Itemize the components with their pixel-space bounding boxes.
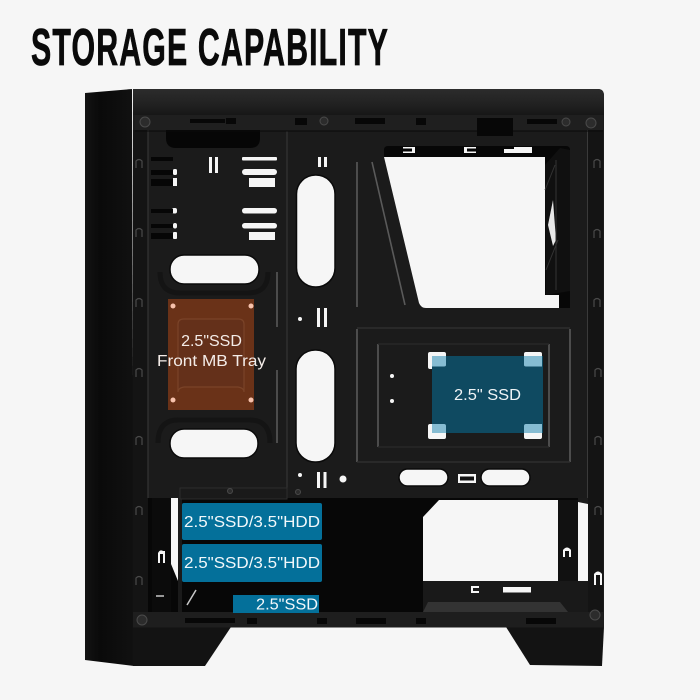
callout: rear 2.5 inch SSD: [428, 352, 543, 439]
lower bay interior: [148, 498, 578, 613]
upper right window: [384, 146, 570, 308]
floor marks: [471, 586, 531, 593]
callout: drive bay 1: 2.5"SSD/3.5"HDD: [184, 514, 320, 531]
right gap: [578, 502, 588, 592]
plate seams: [135, 130, 603, 498]
rear column: [558, 500, 578, 585]
side columns: [133, 130, 603, 615]
callout: drive bay 2: [182, 544, 322, 582]
tray emboss: [178, 319, 244, 392]
screw strip: [135, 115, 603, 131]
case body: [133, 89, 604, 627]
front panel: [85, 89, 134, 666]
white clips: [428, 352, 542, 439]
motherboard tray plate: [148, 131, 588, 498]
left gap: [171, 498, 178, 581]
screws: [137, 117, 600, 625]
floor: [423, 581, 588, 612]
rear fan: [545, 148, 570, 295]
case feet: [133, 627, 604, 666]
callout: front MB tray SSD: [157, 299, 266, 410]
light corners: [432, 356, 542, 433]
mounting slots: [172, 157, 394, 488]
column hooks: [136, 160, 601, 585]
column hook: [563, 548, 571, 557]
top left cut-out: [166, 130, 260, 148]
callout: drive bay 1: [182, 503, 322, 540]
callout: drive bay 3: 2.5"SSD: [256, 596, 318, 614]
left bay shade: [152, 498, 171, 612]
lower flat slots: [399, 469, 530, 486]
cage strip: [178, 498, 182, 612]
rail slots: [185, 118, 557, 624]
callout: drive bay 2: 2.5"SSD/3.5"HDD: [184, 555, 320, 572]
top rail: [133, 89, 604, 115]
computer case: [85, 89, 604, 666]
embossed lines: [277, 162, 570, 462]
bottom rail: [133, 612, 604, 628]
oval recess shading: [158, 272, 270, 443]
tray corner screws: [170, 304, 254, 402]
tray label: Front MB Tray: [157, 353, 266, 370]
drive cage shelf: [180, 488, 287, 499]
floor vent: [423, 602, 568, 612]
title: STORAGE CAPABILITY: [31, 19, 389, 77]
dark side slots: [151, 157, 173, 239]
ssd label: 2.5" SSD: [454, 387, 521, 404]
lower window: [423, 500, 558, 581]
lower left highlights: [156, 590, 196, 605]
callout: drive bay 3: [233, 595, 319, 614]
horizontal ovals: [170, 255, 259, 458]
vertical ovals: [296, 175, 335, 462]
white hooks: [158, 550, 602, 585]
tray label: 2.5"SSD: [181, 333, 242, 350]
